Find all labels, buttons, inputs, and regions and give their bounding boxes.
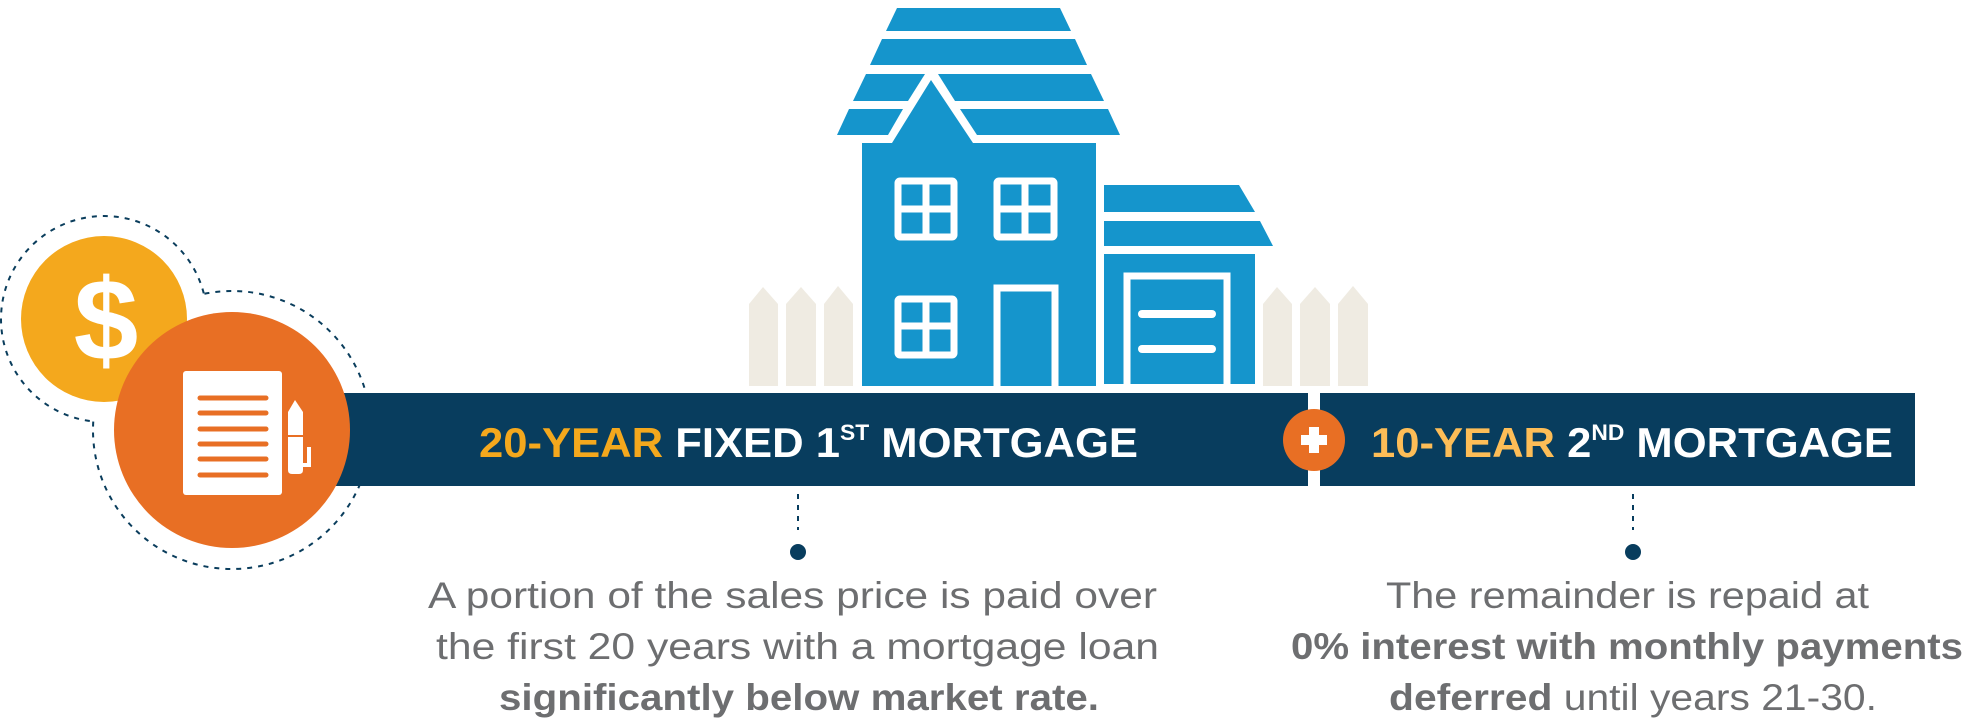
- icon: plus: [1283, 393, 1345, 486]
- title: second mortgage: 10-YEAR 2: [1371, 419, 1590, 466]
- text: second description: [1291, 575, 1963, 718]
- icon rings: dashed outlines: [1, 216, 371, 569]
- bar: first mortgage: [300, 393, 1308, 486]
- title: first mortgage: ST: [840, 420, 870, 445]
- icon group: money and document: [21, 236, 350, 548]
- illustration: house: [749, 8, 1368, 386]
- text: first description: A portion of the sales price is paid over: [428, 575, 1157, 616]
- icon: document with pen: [114, 312, 350, 548]
- text: first description: significantly below market rate.: [499, 677, 1099, 718]
- text: first description: the first 20 years with a mortgage loan: [436, 626, 1159, 667]
- text: second description: The remainder is repaid at: [1386, 575, 1870, 616]
- text: second description: 0% interest with monthly payments: [1291, 626, 1963, 667]
- title: first mortgage: MORTGAGE: [869, 419, 1138, 466]
- title: second mortgage: ND: [1591, 420, 1624, 445]
- icon: dollar coin: [21, 236, 187, 402]
- connector: first: [790, 494, 806, 560]
- text: second description: deferred until years 21-30.: [1389, 677, 1877, 718]
- connector: second: [1625, 494, 1641, 560]
- text: first description: [428, 575, 1159, 718]
- icon: dollar coin: $: [74, 255, 138, 385]
- title: first mortgage: 20-YEAR FIXED 1: [479, 419, 834, 466]
- bar: second mortgage: [1320, 393, 1915, 486]
- title: second mortgage: MORTGAGE: [1624, 419, 1893, 466]
